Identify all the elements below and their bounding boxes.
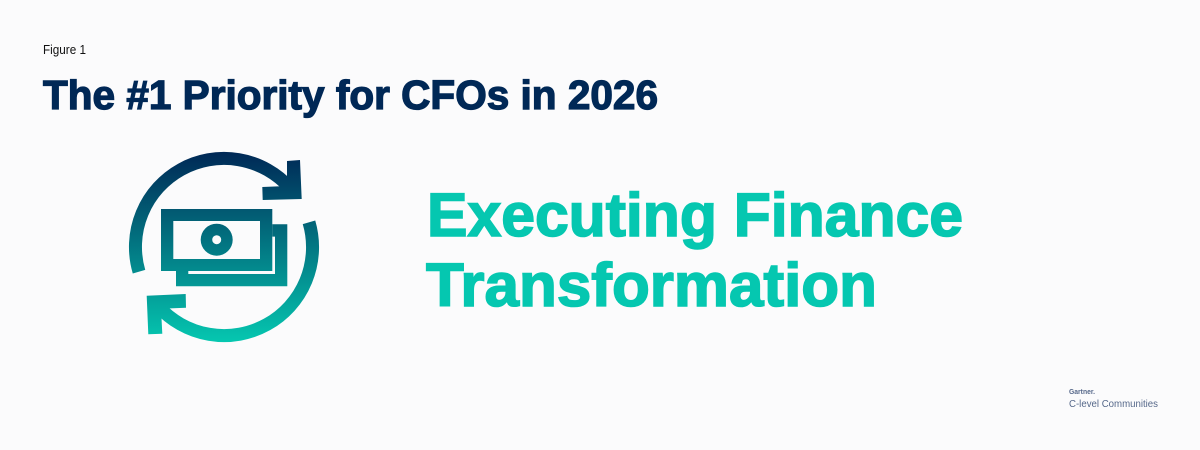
banknote back [176,224,287,286]
banknote centre coin [201,224,233,256]
upper circular arrow [135,158,302,272]
headline [426,181,963,319]
icon: money with circular arrows [135,158,313,336]
headline line 1: Executing Finance [427,181,963,249]
brand unit: C-level Communities [1069,399,1158,410]
banknote front [161,209,272,271]
figure label: Figure 1 [43,43,86,57]
branding: Gartner [1069,387,1158,410]
brand name: Gartner. [1069,387,1095,396]
lower circular arrow [147,222,313,336]
title: The #1 Priority for CFOs in 2026 [43,72,658,118]
headline line 2: Transformation [426,251,877,319]
